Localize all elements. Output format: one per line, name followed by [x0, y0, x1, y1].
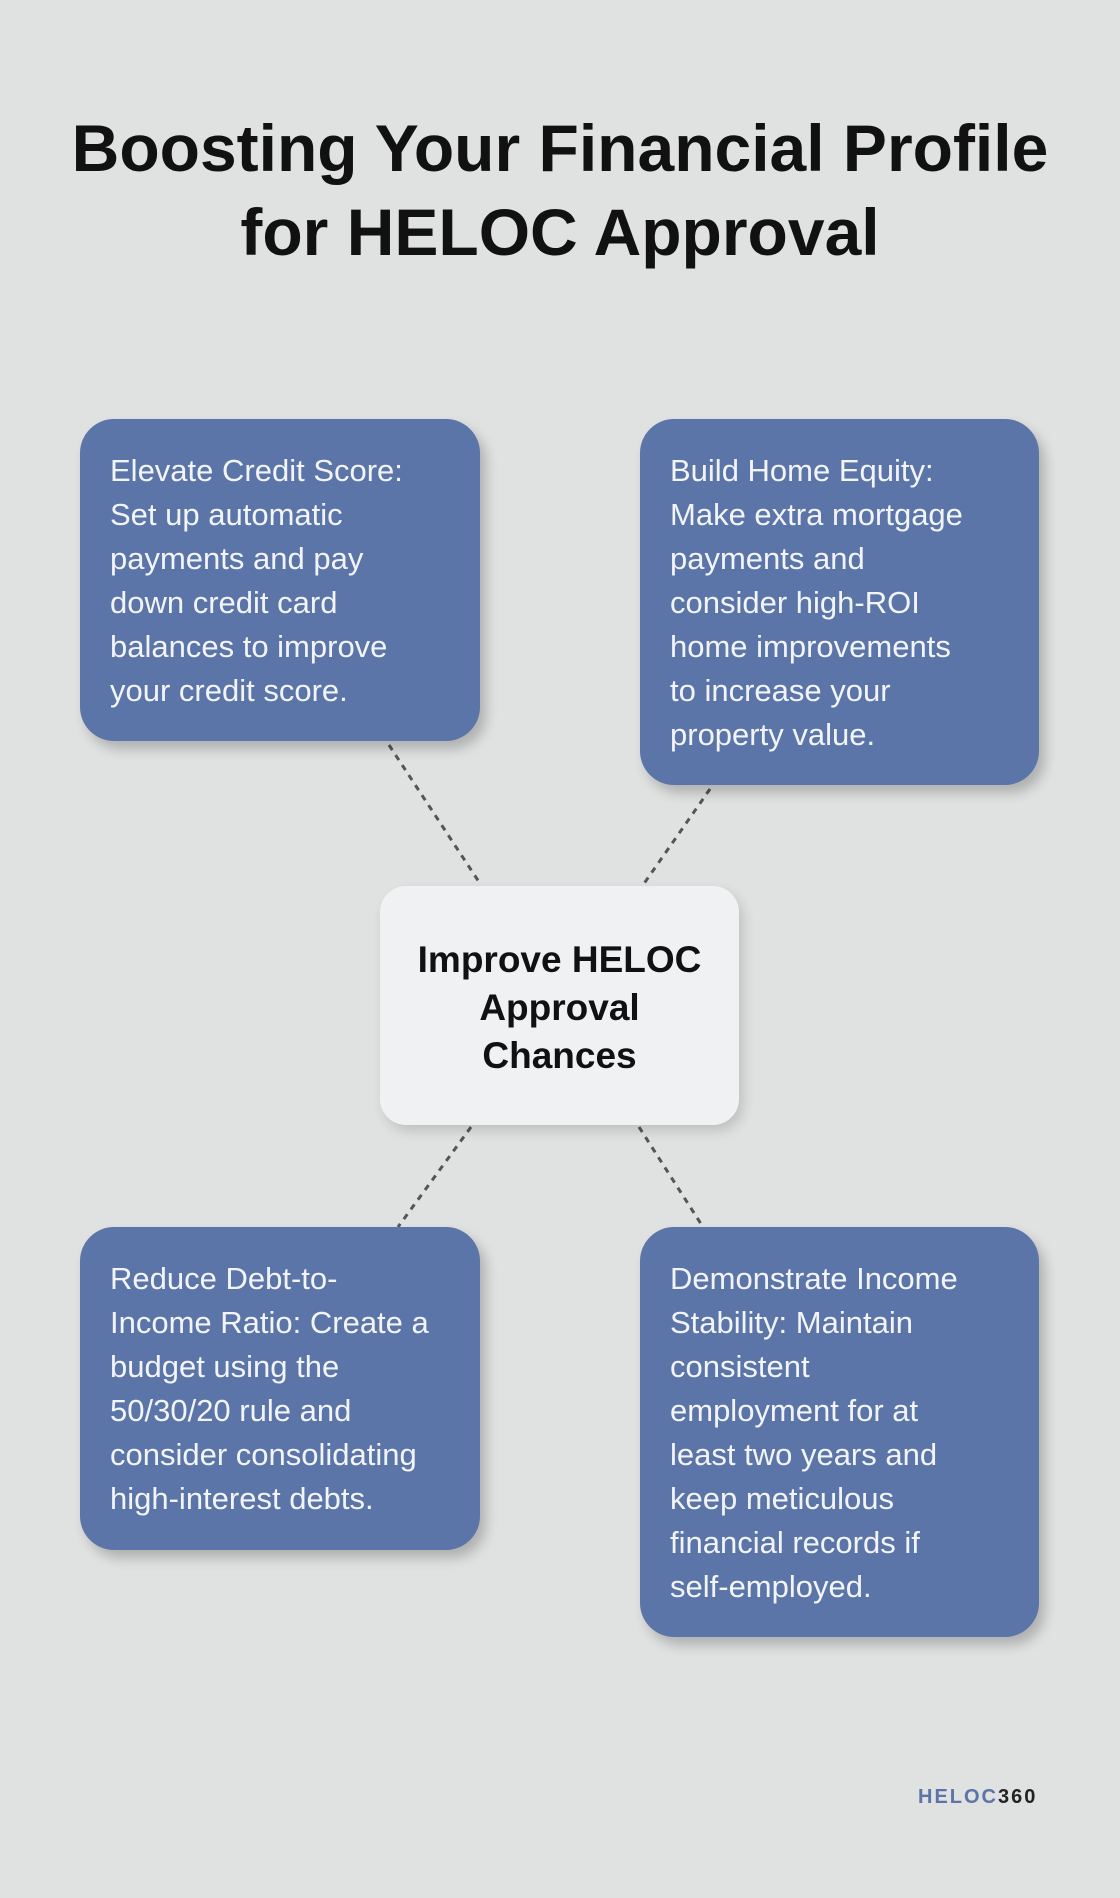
- center node: Improve HELOC: [418, 938, 701, 980]
- panel: credit score: Set up automatic: [110, 497, 343, 532]
- panel: home equity: payments and: [670, 541, 865, 576]
- panel: income stability: Demonstrate Income: [670, 1261, 958, 1296]
- panel: income stability: [640, 1227, 1039, 1637]
- panel: income stability: keep meticulous: [670, 1481, 894, 1516]
- center node: Approval: [479, 986, 640, 1028]
- panel: debt-to-income: Reduce Debt-to-: [110, 1261, 337, 1296]
- panel: income stability: Stability: Maintain: [670, 1305, 913, 1340]
- title: [72, 111, 1048, 269]
- panel: home equity: consider high-ROI: [670, 585, 920, 620]
- panel: debt-to-income: Income Ratio: Create a: [110, 1305, 429, 1340]
- panel: credit score: [80, 419, 480, 741]
- panel: home equity: Make extra mortgage: [670, 497, 963, 532]
- panel: income stability: self-employed.: [670, 1569, 872, 1604]
- panel: home equity: home improvements: [670, 629, 951, 664]
- panel: credit score: your credit score.: [110, 673, 348, 708]
- title: for HELOC Approval: [240, 195, 880, 269]
- panel: debt-to-income: high-interest debts.: [110, 1481, 374, 1516]
- panel: credit score: Elevate Credit Score:: [110, 453, 403, 488]
- panel: home equity: to increase your: [670, 673, 891, 708]
- panel: credit score: balances to improve: [110, 629, 387, 664]
- panel: debt-to-income: consider consolidating: [110, 1437, 417, 1472]
- panel: income stability: consistent: [670, 1349, 810, 1384]
- panel: credit score: down credit card: [110, 585, 337, 620]
- panel: income stability: employment for at: [670, 1393, 918, 1428]
- title: Boosting Your Financial Profile: [72, 111, 1048, 185]
- panel: home equity: Build Home Equity:: [670, 453, 934, 488]
- logo: HELOC360: [918, 1786, 1037, 1808]
- center node: [380, 886, 739, 1125]
- panel: home equity: property value.: [670, 717, 875, 752]
- panel: income stability: least two years and: [670, 1437, 937, 1472]
- panel: income stability: financial records if: [670, 1525, 920, 1560]
- panel: debt-to-income: [80, 1227, 480, 1550]
- panel: home equity: [640, 419, 1039, 785]
- panel: debt-to-income: budget using the: [110, 1349, 339, 1384]
- panel: debt-to-income: 50/30/20 rule and: [110, 1393, 351, 1428]
- center node: Chances: [482, 1034, 637, 1076]
- panel: credit score: payments and pay: [110, 541, 363, 576]
